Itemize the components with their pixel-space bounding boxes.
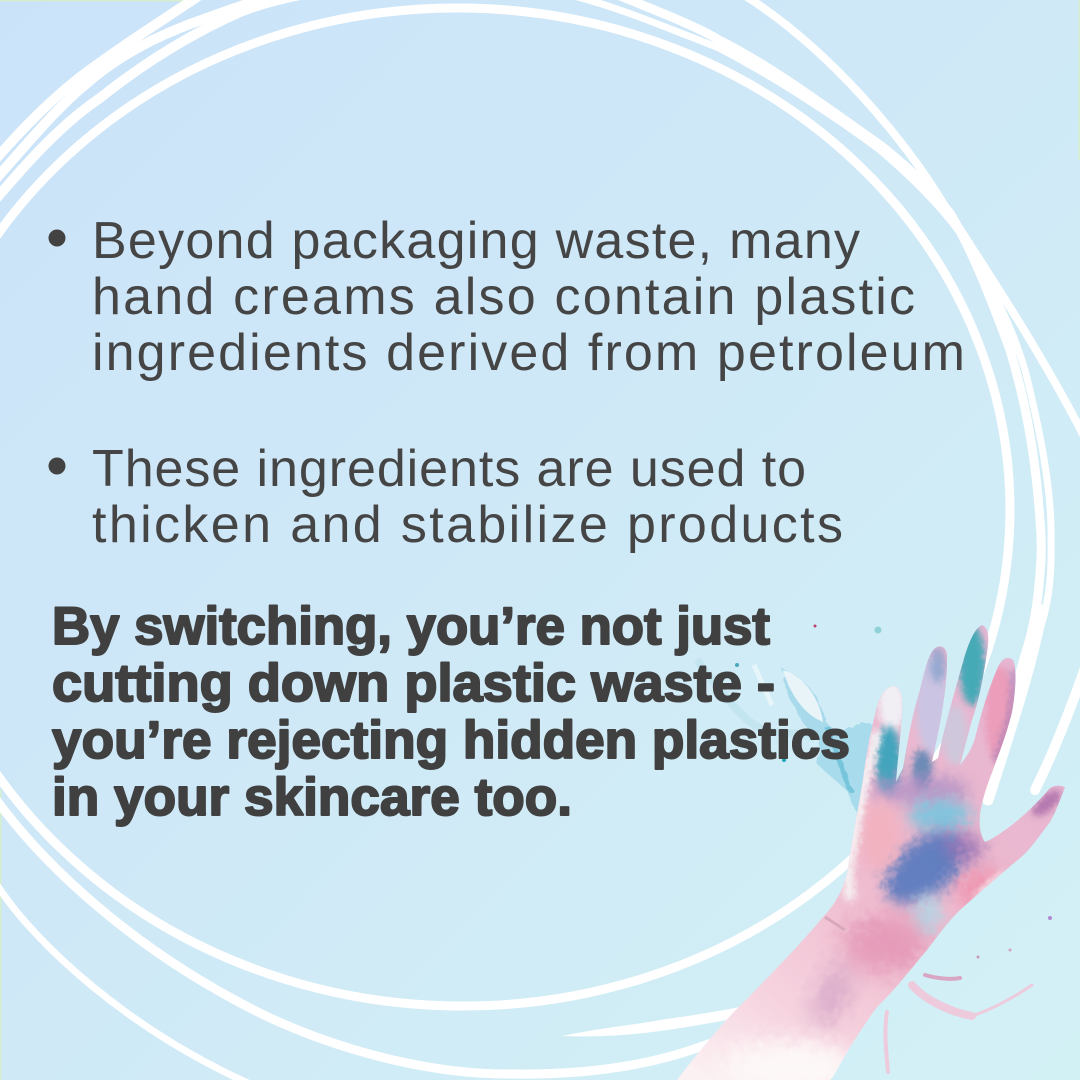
finger washes — [876, 686, 902, 734]
second bullet text: thicken and stabilize products — [92, 496, 843, 554]
bold closing statement: By switching, you’re not just — [52, 597, 770, 656]
palm washes — [870, 775, 970, 805]
first bullet text — [92, 212, 965, 382]
bold closing statement: cutting down plastic waste - — [52, 654, 775, 713]
watercolor hand — [670, 620, 1080, 1080]
bold closing statement: you’re rejecting hidden plastics — [52, 711, 850, 770]
paint splash left of hand — [697, 624, 1052, 958]
first bullet text: ingredients derived from petroleum — [92, 324, 965, 382]
bold closing statement: in your skincare too. — [52, 768, 572, 827]
wrist and arm washes — [843, 915, 927, 975]
bullet list: thicken and stabilize — [48, 440, 843, 554]
tapered short stroke near arm — [562, 1006, 745, 1036]
paint drips below wrist — [885, 975, 1032, 1072]
first bullet text: Beyond packaging waste, many — [92, 212, 860, 270]
bold closing statement — [52, 597, 850, 827]
bullet dot — [48, 458, 66, 474]
hand shape with colour washes — [670, 620, 1080, 1080]
bullet list: packaging and petroleum — [48, 212, 965, 382]
second bullet text — [92, 440, 843, 554]
second bullet text: These ingredients are used to — [92, 440, 806, 498]
bullet dot — [48, 230, 66, 246]
first bullet text: hand creams also contain plastic — [92, 268, 915, 326]
